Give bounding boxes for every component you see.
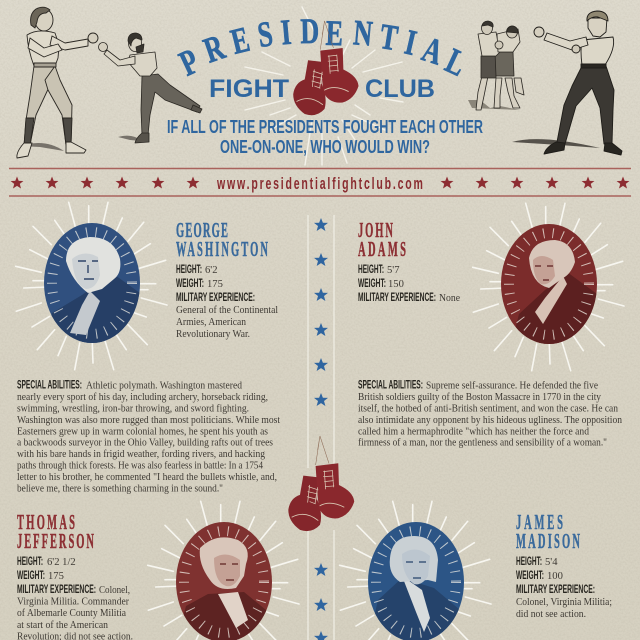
height: HEIGHT:	[17, 556, 43, 568]
john adams bio: ADAMS	[358, 237, 406, 261]
military experience: Revolutionary War.	[176, 329, 250, 340]
stars right	[441, 177, 629, 189]
military experience: Colonel,	[99, 585, 130, 596]
adams special abilities: Supreme self-assurance. He defended the five	[426, 380, 598, 392]
height: 5'7	[387, 265, 400, 276]
adams special abilities: firmness of a man, nor the gentleness and sensibility of a woman."	[358, 438, 607, 449]
portrait: thomas jefferson	[148, 501, 299, 640]
adams special abilities: called him a hermaphrodite "which has neither the force and	[358, 426, 590, 437]
adams special abilities: itself, the hotbed of anti-British sentiment, and won the case. He can	[358, 404, 619, 414]
weight: 100	[547, 571, 563, 582]
washington special abilities: nearly every sport of his day, including archery, horseback riding,	[17, 392, 268, 403]
icon: boxing gloves top	[293, 21, 359, 115]
washington special abilities: letter to his brother, he commented "I heard the bullets whistle, and,	[17, 472, 277, 483]
header	[167, 7, 483, 165]
military experience: MILITARY EXPERIENCE:	[17, 584, 96, 596]
military experience: Colonel, Virginia Militia;	[516, 597, 612, 608]
icon: boxing gloves center	[288, 436, 354, 531]
washington special abilities: with his bare hands in frigid weather, fording rivers, and hacking	[17, 449, 266, 460]
boxer illustration: clinching pair	[468, 21, 524, 110]
adams special abilities: British soldiers guilty of the Boston Massacre in 1770 in the city	[358, 392, 602, 403]
height: HEIGHT:	[516, 556, 542, 568]
height: 6'2	[205, 265, 218, 276]
title: club: CLUB	[365, 75, 435, 103]
website url: www.presidentialfightclub.com	[216, 173, 423, 193]
george washington bio	[176, 218, 278, 340]
military experience: of Albemarle County Militia	[17, 608, 126, 619]
james madison bio	[516, 510, 612, 620]
military experience: General of the Continental	[176, 305, 278, 316]
height: 6'2 1/2	[47, 557, 76, 568]
james madison bio: MADISON	[516, 529, 580, 553]
question line 1: IF ALL OF THE PRESIDENTS FOUGHT EACH OTHER	[167, 117, 483, 137]
boxer illustration: left standing figure	[17, 7, 98, 158]
height: 5'4	[545, 557, 558, 568]
title: presidential arc: E	[325, 13, 344, 53]
title: presidential arc: A	[418, 29, 448, 73]
name: JOHN	[358, 218, 393, 242]
name: JAMES	[516, 510, 563, 534]
weight: WEIGHT:	[176, 278, 204, 290]
washington special abilities: a backwoods surveyor in the Ohio Valley, building rafts out of trees	[17, 438, 273, 449]
washington special abilities	[17, 380, 280, 495]
name: THOMAS	[17, 510, 75, 534]
weight: WEIGHT:	[516, 570, 544, 582]
title: presidential arc: E	[227, 19, 253, 62]
boxer illustration: lincoln kicking	[98, 33, 202, 143]
title: presidential arc: L	[440, 40, 472, 84]
title: presidential arc: I	[401, 22, 420, 63]
weight: 175	[48, 571, 64, 582]
washington special abilities: paths through thick forests. He was also fearless in battle: In a 1754	[17, 461, 264, 472]
military experience	[176, 292, 278, 340]
military experience: None	[439, 293, 460, 304]
title: presidential arc: S	[255, 13, 275, 55]
weight: WEIGHT:	[17, 570, 45, 582]
washington special abilities: swimming, wrestling, iron-bar throwing, and sword fighting.	[17, 404, 249, 414]
weight: 150	[388, 279, 404, 290]
washington special abilities: Athletic polymath. Washington mastered	[86, 380, 243, 392]
title: presidential arc: T	[377, 16, 401, 58]
adams special abilities: SPECIAL ABILITIES:	[358, 380, 423, 392]
title: presidential arc: R	[199, 26, 230, 71]
washington special abilities: believe me, there is something charming in the sound."	[17, 484, 223, 495]
title: presidential arc: N	[352, 12, 374, 54]
washington special abilities: Washington was also more rugged than most politicians. While most	[17, 415, 280, 426]
adams special abilities	[358, 380, 623, 449]
military experience: Virginia Militia. Commander	[17, 596, 129, 608]
banner	[9, 168, 631, 196]
name: GEORGE	[176, 218, 228, 242]
military experience	[516, 584, 612, 620]
george washington bio: WASHINGTON	[176, 237, 268, 261]
washington special abilities: SPECIAL ABILITIES:	[17, 380, 82, 392]
military experience: MILITARY EXPERIENCE:	[176, 292, 255, 304]
title sunburst	[245, 7, 403, 165]
title: presidential arc: D	[300, 11, 319, 51]
military experience: Armies, American	[176, 317, 247, 328]
washington special abilities: Easterners grew up in warm colonial homes, he spent his youth as	[17, 426, 268, 437]
military experience: at start of the American	[17, 620, 109, 631]
portrait: george washington	[16, 202, 167, 370]
portrait: james madison	[340, 501, 491, 640]
military experience: MILITARY EXPERIENCE:	[358, 292, 436, 304]
weight: 175	[207, 279, 223, 290]
center divider with stars	[308, 215, 334, 640]
thomas jefferson bio: JEFFERSON	[17, 529, 94, 553]
military experience	[17, 584, 133, 640]
stars left	[11, 177, 199, 189]
boxer illustration: right standing figure	[512, 11, 622, 155]
weight: WEIGHT:	[358, 278, 386, 290]
military experience: did not see action.	[516, 609, 586, 620]
height: HEIGHT:	[358, 264, 384, 276]
john adams bio	[358, 218, 460, 304]
title: fight: FIGHT	[209, 75, 289, 103]
portrait: john adams	[473, 203, 624, 371]
question line 2: ONE-ON-ONE, WHO WOULD WIN?	[220, 137, 430, 157]
height: HEIGHT:	[176, 264, 202, 276]
thomas jefferson bio	[17, 510, 133, 640]
title: presidential arc	[173, 11, 472, 84]
title: presidential arc: P	[173, 41, 205, 84]
title: presidential arc: I	[279, 12, 293, 52]
